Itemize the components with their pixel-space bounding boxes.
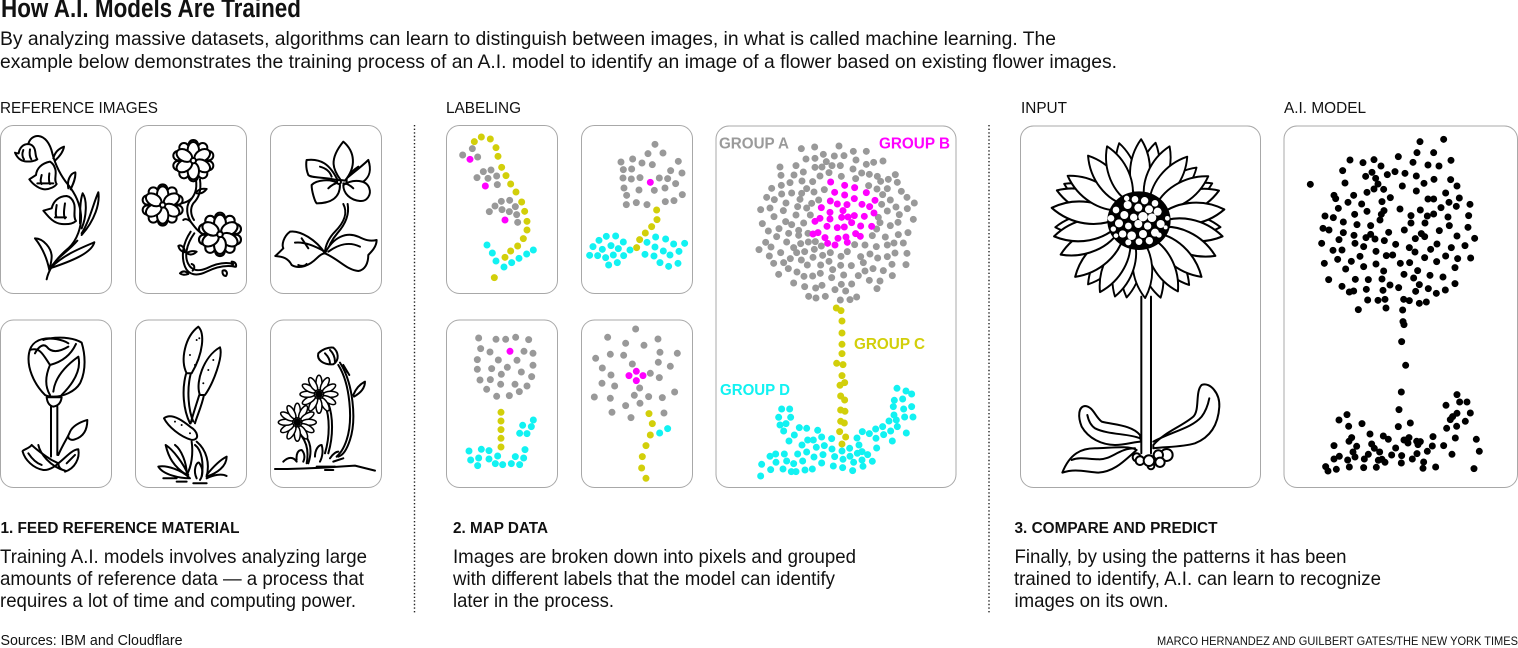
panel: cattails xyxy=(136,320,246,488)
dots: yellow stem xyxy=(642,414,652,478)
dots: cyan leaves xyxy=(487,245,533,267)
step 3 body xyxy=(1014,546,1381,612)
panel: labeled large flower xyxy=(716,126,956,488)
panel: labeling flower 2 xyxy=(582,126,692,294)
dots: group B magenta xyxy=(813,182,875,245)
label: group D: GROUP D xyxy=(720,382,790,399)
intro text: By analyzing massive datasets, algorithms can learn to distinguish between images, in what is called machine learning. The xyxy=(0,28,1056,50)
label: group A: GROUP A xyxy=(719,136,789,152)
step 2 body: with different labels that the model can identify xyxy=(452,568,835,590)
dots: cyan leaves xyxy=(660,429,668,433)
step 1 body: amounts of reference data — a process that xyxy=(0,568,364,590)
step 2 text xyxy=(452,520,856,612)
step 3 body: images on its own. xyxy=(1014,590,1168,612)
stem xyxy=(1141,297,1151,453)
dots: group D cyan xyxy=(761,388,913,476)
panel: small daisies xyxy=(270,320,382,488)
dots: gray petals xyxy=(621,144,682,205)
dots: gray petals xyxy=(594,329,677,418)
dots: group A gray xyxy=(759,146,914,300)
petals xyxy=(1050,139,1226,300)
panel: rose xyxy=(0,320,112,488)
section label: reference images: REFERENCE IMAGES xyxy=(0,100,158,117)
dots: cyan leaves xyxy=(469,420,533,466)
panel: bell flower xyxy=(0,126,112,294)
section label: A.I. model: A.I. MODEL xyxy=(1284,100,1366,117)
step 2 body xyxy=(452,546,856,612)
step 2 body: later in the process. xyxy=(453,590,614,612)
panel: labeling flower 3 xyxy=(446,320,558,488)
label: group C: GROUP C xyxy=(854,336,925,353)
section label: input: INPUT xyxy=(1021,100,1068,117)
panel: labeling flower 4 xyxy=(582,320,692,488)
dots: yellow stem xyxy=(490,412,511,447)
panel: three round blossoms xyxy=(136,126,246,294)
intro text xyxy=(0,28,1117,73)
step 1 body xyxy=(0,546,367,612)
step 2 body: Images are broken down into pixels and grouped xyxy=(453,546,856,568)
step 1 body: requires a lot of time and computing power. xyxy=(0,590,356,612)
step 3 body: trained to identify, A.I. can learn to recognize xyxy=(1014,568,1381,590)
dots: magenta center xyxy=(499,341,520,362)
dots: magenta centers xyxy=(470,159,505,220)
step 3 heading: 3. COMPARE AND PREDICT xyxy=(1014,520,1218,537)
section label: labeling: LABELING xyxy=(446,100,521,117)
panel: A.I. model dots xyxy=(1284,126,1518,488)
dots: magenta center xyxy=(640,172,661,193)
black dot flower xyxy=(1310,139,1479,471)
panel: input flower xyxy=(1020,126,1260,488)
step 1 text xyxy=(0,520,367,612)
step 3 text xyxy=(1014,520,1381,612)
root bulbs xyxy=(1161,449,1173,461)
step 1 heading: 1. FEED REFERENCE MATERIAL xyxy=(0,520,239,537)
dots: yellow stem xyxy=(637,210,657,248)
dots: gray petals xyxy=(477,337,533,396)
dots: cyan leaves xyxy=(590,236,685,266)
dots: magenta center xyxy=(629,371,643,381)
dots: gray petals xyxy=(463,149,518,222)
intro text: example below demonstrates the training process of an A.I. model to identify an image of a flower based on existing flower images. xyxy=(0,51,1117,73)
dots: yellow stem xyxy=(474,137,527,278)
dots: group C yellow xyxy=(836,308,846,444)
panel: large-petal flower xyxy=(270,126,382,294)
step 1 body: Training A.I. models involves analyzing large xyxy=(0,546,367,568)
flower center xyxy=(1107,191,1171,250)
panel: labeling flower 1 xyxy=(446,126,558,294)
step 3 body: Finally, by using the patterns it has been xyxy=(1014,546,1346,568)
leaves xyxy=(1153,384,1219,448)
step 2 heading: 2. MAP DATA xyxy=(453,520,548,537)
label: group B: GROUP B xyxy=(879,136,950,152)
